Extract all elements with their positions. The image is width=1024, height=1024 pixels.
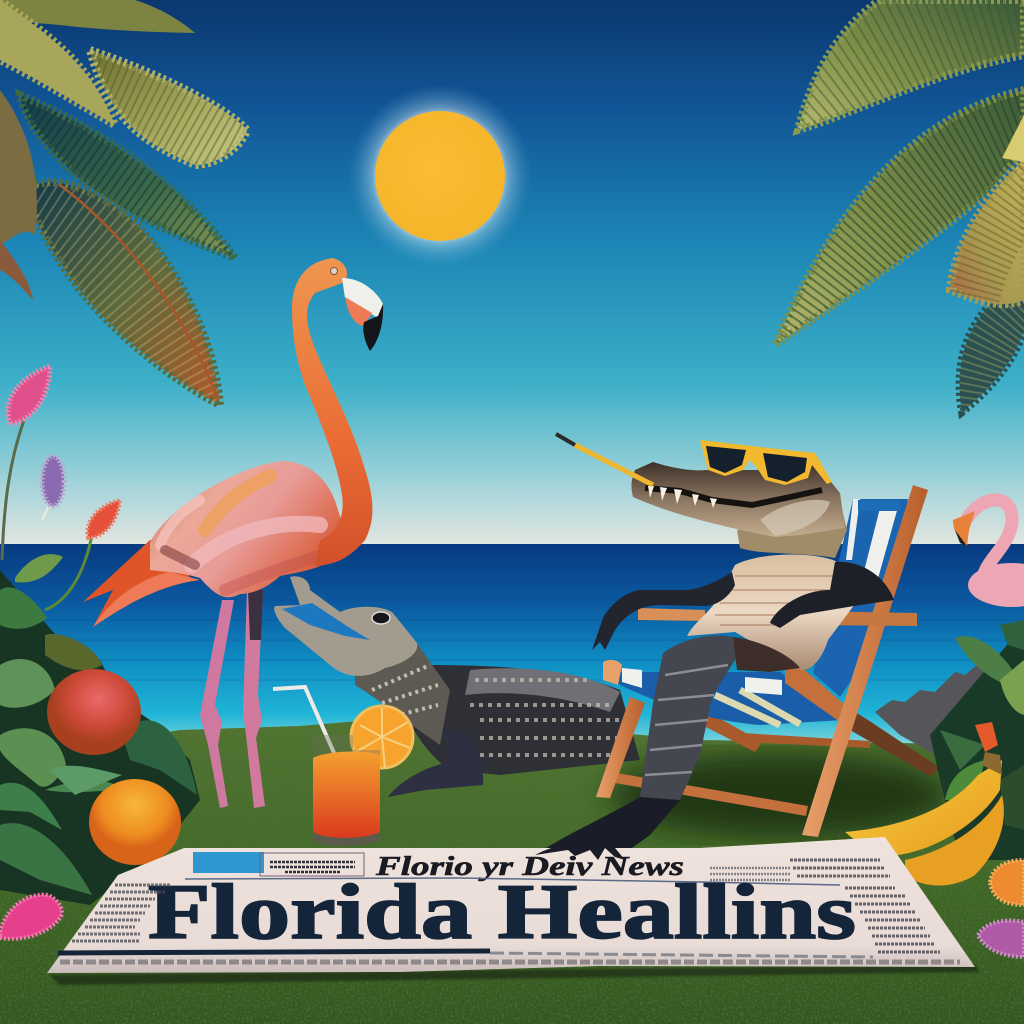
seat rail — [785, 666, 845, 722]
right arm — [770, 562, 894, 628]
neck — [737, 500, 847, 558]
sun — [348, 84, 532, 268]
seat canvas — [603, 660, 843, 725]
right palm fronds — [775, 0, 1024, 412]
flower bottom left — [0, 895, 62, 939]
red grapefruit — [47, 669, 141, 755]
leaves — [15, 554, 63, 583]
chair alligator — [535, 434, 894, 858]
chair shadow on grass — [610, 753, 950, 837]
glass — [312, 735, 380, 846]
legs — [200, 590, 265, 808]
right masthead copy — [710, 868, 790, 880]
sky — [0, 0, 1024, 546]
foot — [540, 797, 680, 855]
head — [632, 462, 845, 537]
right column copy — [790, 860, 940, 952]
blue photo — [193, 852, 264, 873]
lying alligator — [274, 576, 990, 797]
masthead small box — [260, 853, 364, 876]
head — [274, 576, 417, 676]
armrests — [803, 611, 917, 626]
body — [150, 461, 343, 597]
pencil — [556, 434, 653, 485]
flowers left — [2, 366, 120, 610]
paper sheet — [47, 837, 975, 973]
drink — [273, 687, 413, 846]
head and beak — [330, 268, 383, 351]
bananas — [845, 752, 1004, 886]
back canvas — [813, 499, 908, 697]
tail feathers — [83, 540, 190, 627]
rule under masthead — [185, 878, 840, 885]
masthead title: Florio yr Deiv News — [375, 851, 684, 881]
orange slice — [351, 706, 413, 768]
right foliage — [930, 620, 1024, 860]
flower right orange — [990, 860, 1024, 905]
torso — [687, 555, 873, 670]
headline: Florida Heallins — [148, 868, 856, 955]
leg — [535, 635, 738, 858]
flower right purple — [978, 921, 1024, 957]
flamingo — [83, 258, 383, 808]
straw — [273, 687, 338, 762]
grass — [0, 716, 1024, 1024]
tail — [875, 658, 990, 760]
mouth and teeth — [645, 488, 822, 505]
rear legs and bars — [615, 712, 940, 816]
front leg — [388, 729, 483, 797]
sunglasses — [700, 440, 832, 485]
neck scales — [355, 645, 450, 745]
front legs — [596, 697, 645, 798]
left palm fronds — [0, 0, 247, 405]
neck — [292, 258, 372, 566]
newspaper — [47, 837, 980, 985]
eye — [372, 612, 390, 624]
left arm — [592, 572, 735, 650]
sea — [0, 544, 1024, 744]
wing feathers — [160, 476, 330, 590]
open mouth — [282, 603, 370, 640]
thigh — [733, 637, 800, 672]
orange — [89, 779, 181, 865]
scaly body — [395, 665, 640, 775]
lower wing — [93, 572, 200, 627]
cheek patch — [760, 500, 830, 536]
left column copy — [72, 885, 170, 941]
deck chair — [596, 485, 940, 837]
bottom rule — [58, 951, 960, 962]
paper shadow — [50, 965, 980, 985]
left foliage — [0, 554, 200, 905]
chair alligator claws over paper — [535, 841, 625, 860]
small flamingo right — [953, 500, 1024, 607]
